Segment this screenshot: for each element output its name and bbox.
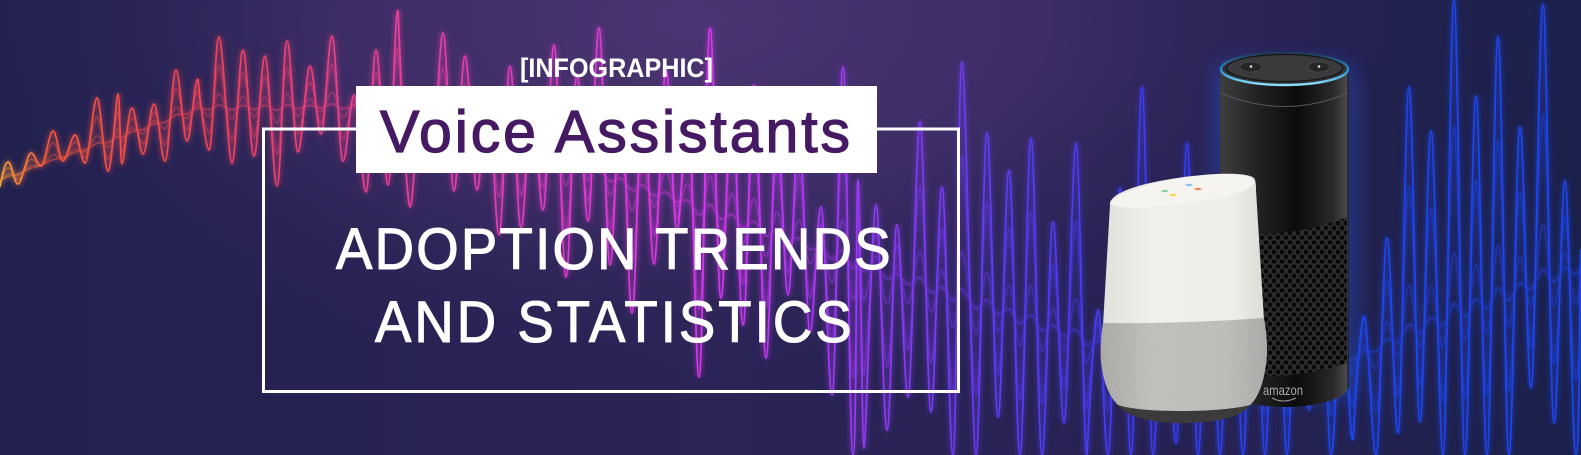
echo body [1220,70,1349,407]
inner waveform [0,86,1581,377]
subtitle line 1: ADOPTION TRENDS [336,216,891,281]
echo collar line [1221,93,1348,106]
echo top [1221,53,1348,85]
home indicator lights [1162,184,1202,196]
echo top inner [1226,54,1342,82]
home base [1116,402,1252,423]
title text: Voice Assistants [380,99,850,165]
echo speaker grille [1222,217,1347,377]
subtitle [336,216,891,354]
home fabric base [1101,318,1267,411]
eyebrow label: [INFOGRAPHIC] [520,53,713,83]
subtitle line 2: AND STATISTICS [375,289,852,354]
echo buttons [1240,62,1330,72]
home white body [1103,174,1264,325]
amazon logo: amazon [1263,382,1303,398]
title frame [264,129,958,392]
device: amazon echo [1212,53,1358,407]
title banner [356,86,877,173]
amazon logo [1263,382,1303,401]
home top surface [1110,174,1255,208]
centre waveform [0,101,1581,362]
echo glow [1212,60,1358,400]
device: google home [1101,174,1267,423]
